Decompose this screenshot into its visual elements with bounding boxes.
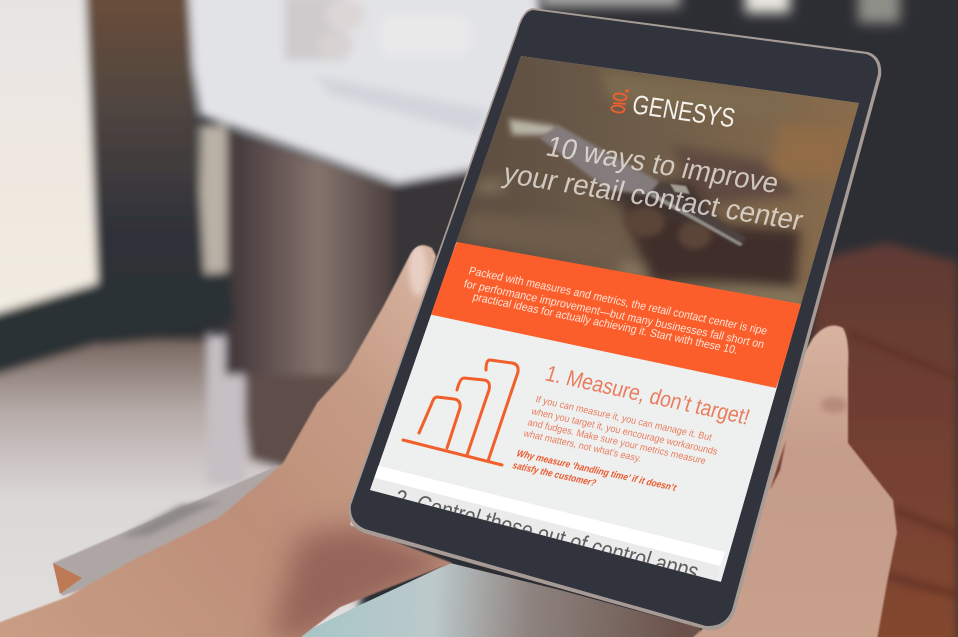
section 1 body text: and fudges. Make sure your metrics measure (526, 417, 707, 467)
title: 10 ways to improve (543, 131, 782, 200)
tablet dark bezel (351, 10, 878, 626)
title (500, 137, 804, 230)
left thumb highlight (409, 244, 427, 296)
orange intro band: practical ideas for actually achieving it. Start with these 10. (471, 291, 739, 357)
orange intro band (428, 242, 806, 388)
background: wood table at right (800, 243, 958, 637)
section 1 callout: Why measure ‘handling time’ if it doesn’t (515, 448, 678, 494)
background: cloth and table surface at bottom (295, 563, 700, 637)
section 1 body text (521, 394, 719, 467)
left palm shadow (270, 525, 460, 637)
section 1 heading: 1. Measure, don’t target! (542, 361, 753, 429)
section 1 body text: what matters, not what’s easy. (521, 428, 643, 465)
section 2 background (370, 478, 715, 580)
right hand (690, 326, 897, 637)
right hand shadow beside tablet (770, 420, 790, 490)
section 2 heading clipped by the bezel: 2. Control those out of control apps (391, 485, 702, 586)
screen page background (370, 56, 859, 582)
white divider strip (371, 465, 725, 566)
tablet body (349, 8, 881, 630)
section 1 body text: when you target it, you encourage workarounds (529, 406, 719, 458)
right thumb crease (821, 397, 847, 413)
section 1 callout (512, 450, 677, 491)
background: upper right bokeh (540, 0, 900, 23)
section 1 body text: If you can measure it, you can manage it. But (534, 394, 713, 444)
logo wordmark: GENESYS (630, 89, 738, 133)
orange intro band: Packed with measures and metrics, the retail contact center is ripe (467, 265, 769, 338)
section 1 callout: satisfy the customer? (511, 460, 597, 489)
icon: bar chart (403, 360, 518, 465)
orange intro band: for performance improvement—but many businesses fall short on (462, 278, 766, 351)
title: your retail contact center (500, 158, 807, 237)
logo (610, 89, 734, 127)
header photo: hand holding phone (453, 56, 859, 306)
background: soft blurred shapes (0, 0, 540, 637)
logo icon (611, 89, 629, 113)
background: table edge at left (53, 466, 290, 596)
tablet silver rim (349, 8, 881, 630)
left hand and arm (0, 244, 460, 637)
tablet screen (362, 56, 859, 590)
